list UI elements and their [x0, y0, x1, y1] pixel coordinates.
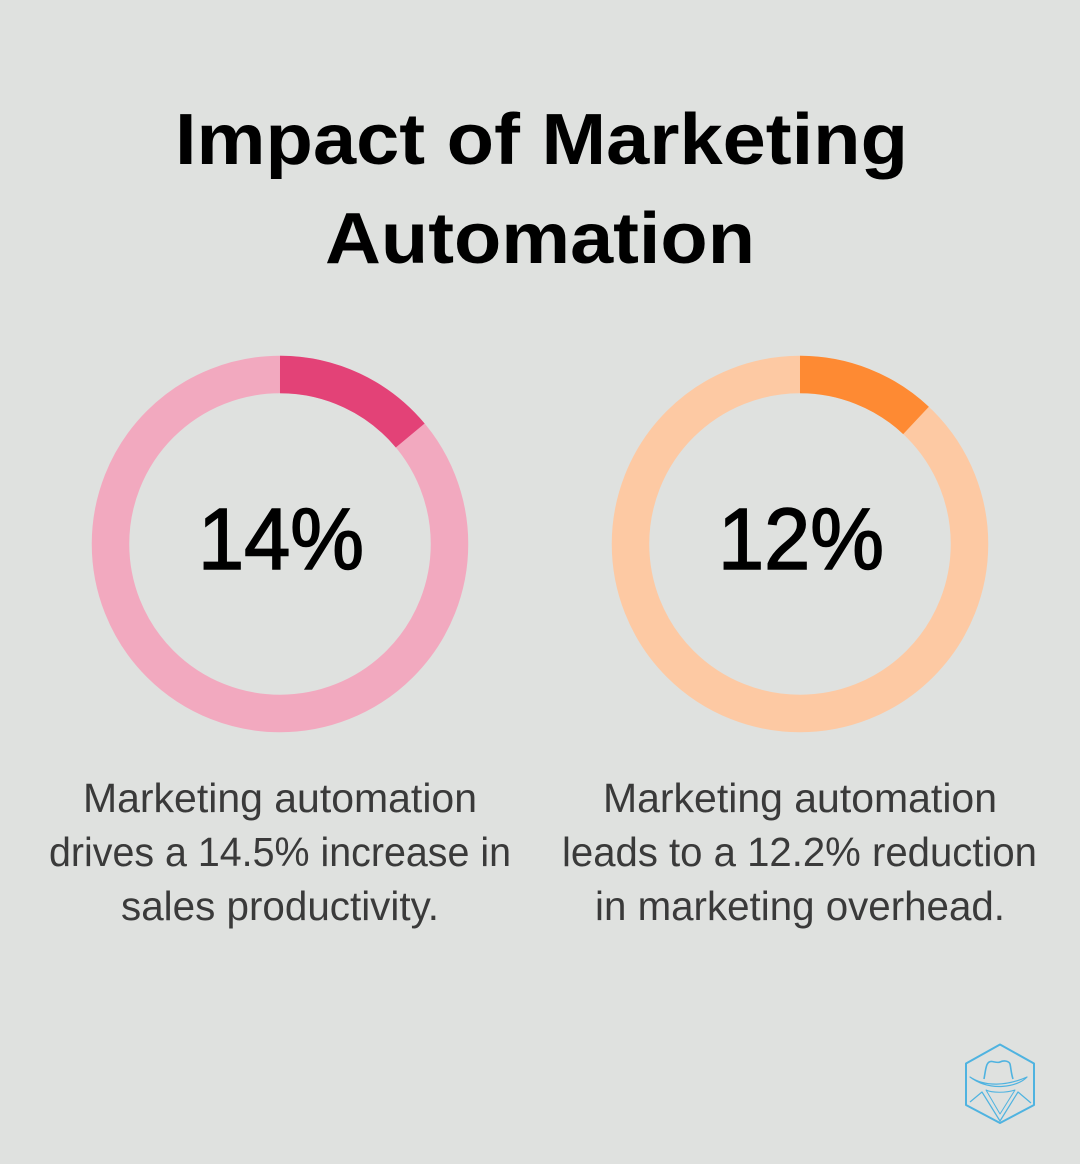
- caption: sales productivity: Marketing automation: [83, 775, 477, 821]
- title: Impact of Marketing: [175, 100, 908, 180]
- caption: marketing overhead: in marketing overhead.: [595, 883, 1005, 929]
- panel: 12% marketing overhead: [562, 374, 1037, 929]
- caption: marketing overhead: [562, 775, 1037, 929]
- caption: marketing overhead: leads to a 12.2% reduction: [562, 829, 1037, 875]
- caption: marketing overhead: Marketing automation: [603, 775, 997, 821]
- caption: sales productivity: [49, 775, 511, 929]
- title: [175, 100, 908, 279]
- donut chart: 14%: [110, 374, 450, 714]
- donut chart: 12%: [630, 374, 970, 714]
- caption: sales productivity: sales productivity.: [121, 883, 439, 929]
- caption: sales productivity: drives a 14.5% increase in: [49, 829, 511, 875]
- icon: hexagon logo with hat: [966, 1044, 1034, 1123]
- value: 14%: 14%: [198, 491, 364, 588]
- value: 12%: 12%: [718, 491, 884, 588]
- panel: 14% sales productivity: [49, 374, 511, 929]
- title: Automation: [325, 199, 755, 279]
